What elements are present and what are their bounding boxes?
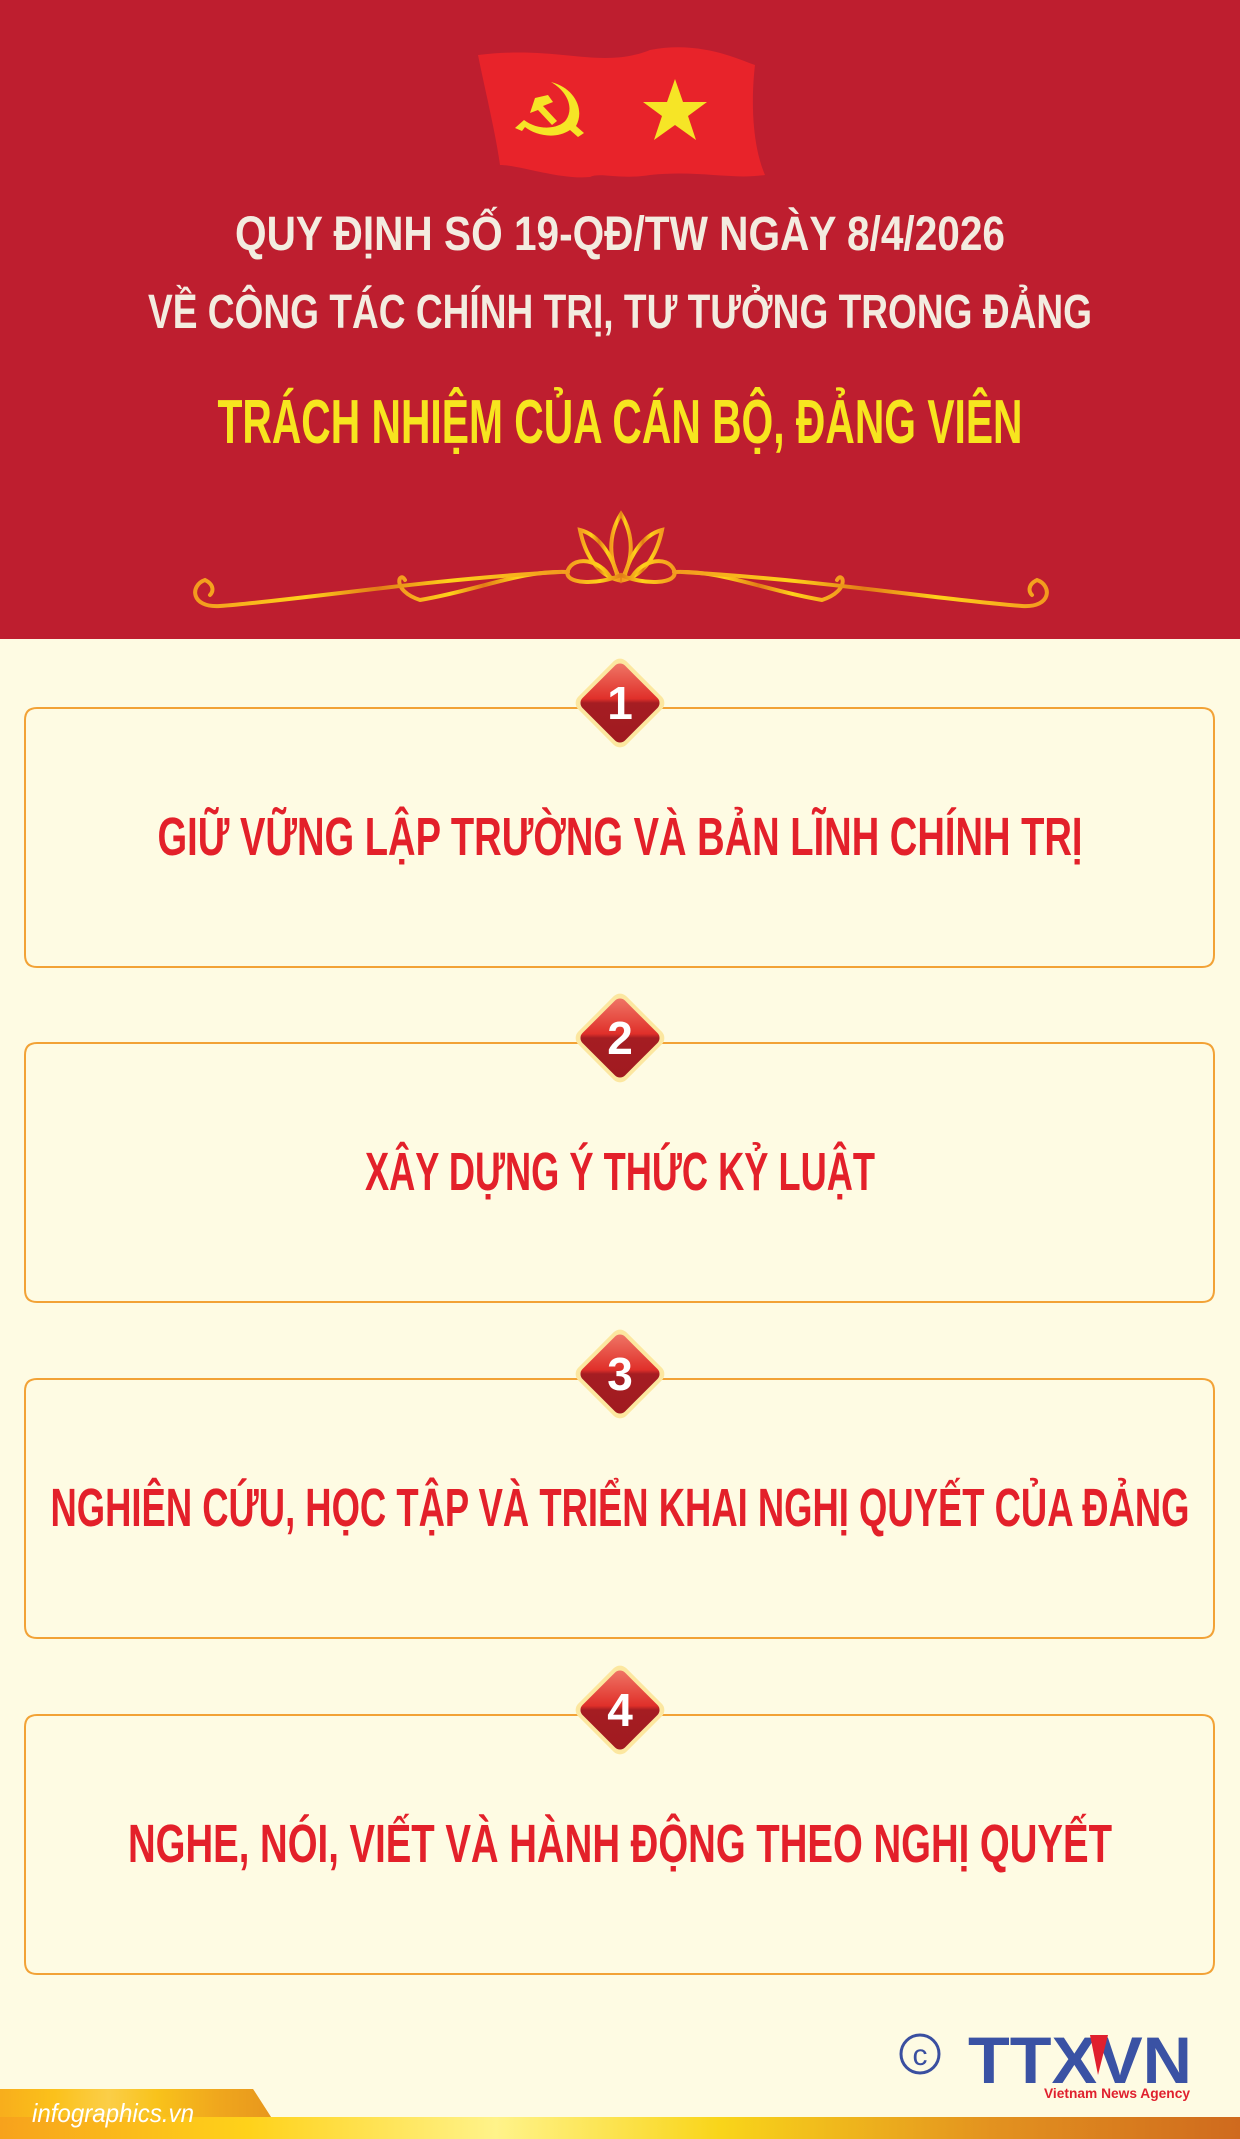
number badge 2: 2 xyxy=(607,1012,633,1064)
logo: TTXVN: c xyxy=(912,2039,928,2072)
number badge 2 xyxy=(572,990,668,1086)
panel: item 2 xyxy=(25,990,1214,1302)
ornament: lotus divider xyxy=(195,514,1047,606)
title: QUY ĐỊNH SỐ 19-QĐ/TW NGÀY 8/4/2026 xyxy=(235,206,1005,261)
title xyxy=(148,206,1092,339)
icon: party flag xyxy=(478,47,765,177)
logo: TTXVN: TTXVN xyxy=(968,2023,1192,2097)
star xyxy=(643,79,707,140)
logo: TTXVN: Vietnam News Agency xyxy=(1044,2085,1190,2101)
number badge 3 xyxy=(572,1326,668,1422)
panel: item 3 xyxy=(25,1326,1214,1638)
number badge 3: 3 xyxy=(607,1348,633,1400)
hammer and sickle xyxy=(515,82,584,137)
panel: item 4 xyxy=(25,1662,1214,1974)
number badge 4 xyxy=(572,1662,668,1758)
footer bar xyxy=(0,2089,1240,2139)
panel: item 1 xyxy=(25,655,1214,967)
number badge 4: 4 xyxy=(607,1684,633,1736)
number badge 1 xyxy=(572,655,668,751)
header background xyxy=(0,0,1240,639)
text: item 2: XÂY DỰNG Ý THỨC KỶ LUẬT xyxy=(365,1141,875,1202)
number badge 1: 1 xyxy=(607,677,633,729)
text: infographics.vn: infographics.vn xyxy=(32,2098,194,2128)
